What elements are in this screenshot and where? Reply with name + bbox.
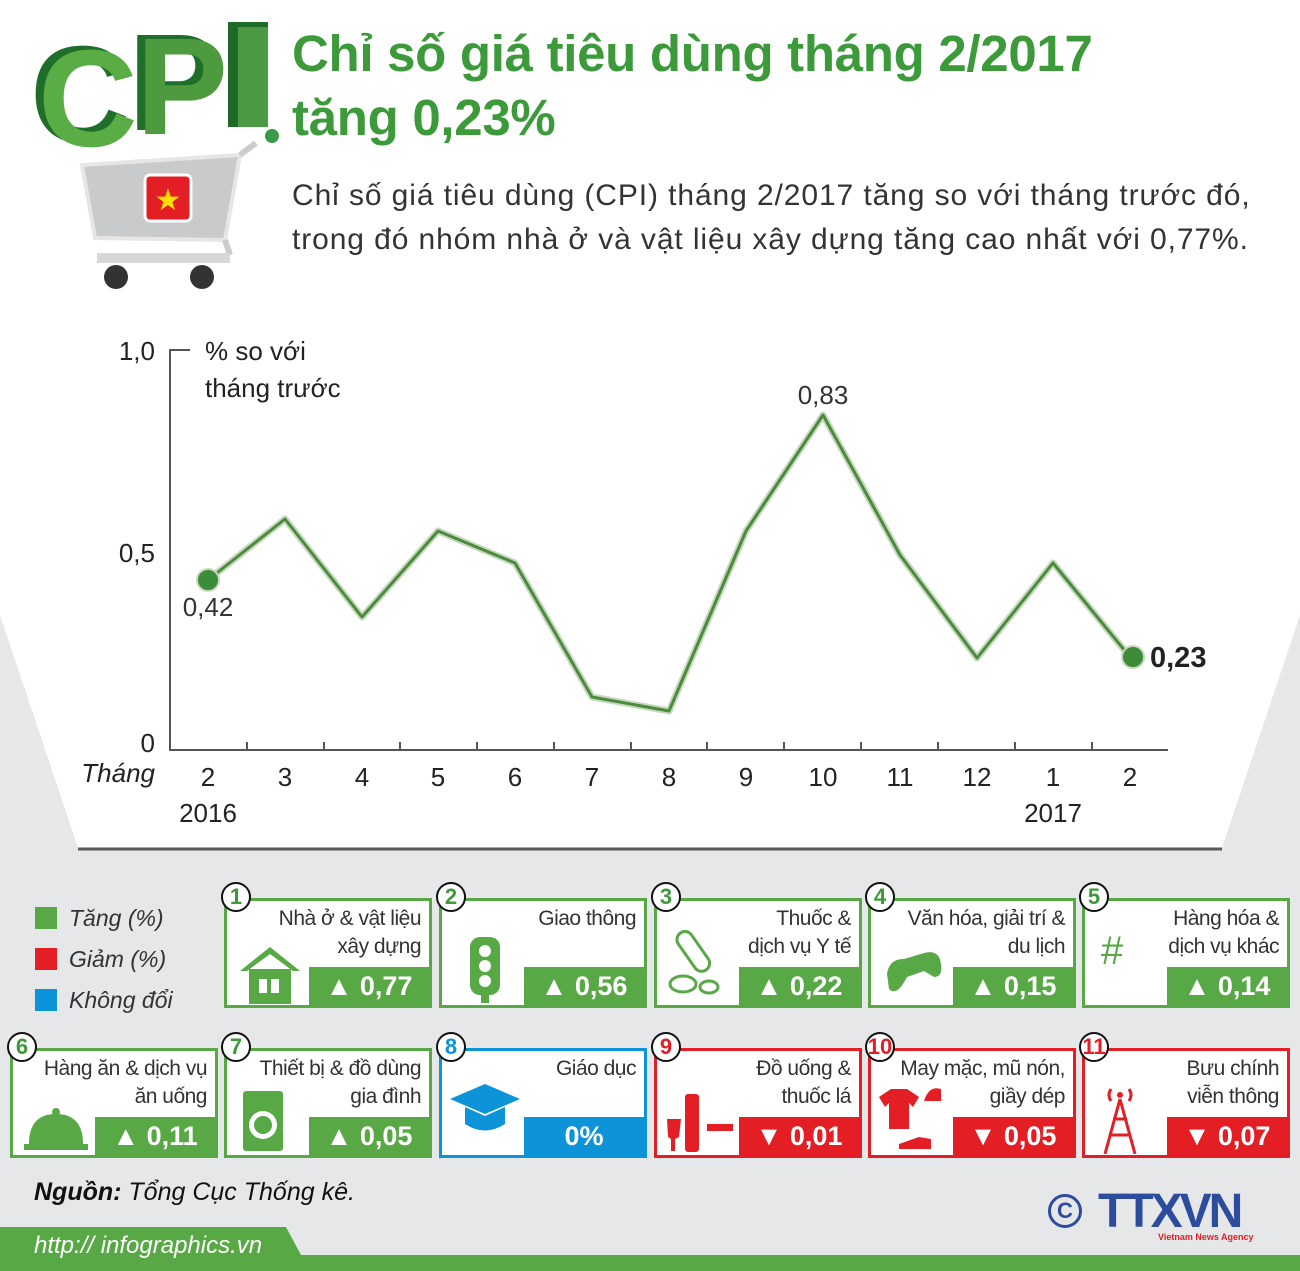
text: 7 [230,1034,242,1059]
legend [35,905,174,1013]
card 3: Thuốc & [776,907,851,930]
card 11: ▼ 0,07 [1184,1121,1270,1151]
text: 8 [445,1034,457,1059]
card 4: du lịch [1008,935,1065,958]
card 4: Văn hóa, giải trí & [908,907,1065,930]
card 9: Đồ uống & [756,1057,851,1080]
text: 2 [445,884,457,909]
card 5: ▲ 0,14 [1184,971,1270,1001]
line chart: 0,83 [798,380,848,410]
line chart: 3 [278,762,292,792]
logo: CPI cart: C [30,18,130,172]
card 9 [654,1048,862,1158]
line chart: 12 [963,762,991,792]
card 6 [10,1048,218,1158]
line chart: 2016 [179,798,237,828]
card 7 [224,1048,432,1158]
card 3: ▲ 0,22 [756,971,842,1001]
card 6: ăn uống [135,1085,207,1108]
text: 4 [874,884,886,909]
card 7: Thiết bị & đồ dùng [260,1057,421,1080]
card 1: xây dựng [337,935,421,958]
text: 10 [868,1034,892,1059]
line chart: 8 [662,762,676,792]
card 5: # [1101,929,1124,973]
card 10: ▼ 0,05 [970,1121,1056,1151]
logo: CPI cart: ★ [155,184,181,217]
card 5 [1082,898,1290,1008]
line chart: 2 [1123,762,1137,792]
subtitle: trong đó nhóm nhà ở và vật liệu xây dựng tăng cao nhất với 0,77%. [292,223,1249,256]
line chart: 4 [355,762,369,792]
card 2: ▲ 0,56 [541,971,627,1001]
card 1: Nhà ở & vật liệu [279,907,421,930]
line chart: 2017 [1024,798,1082,828]
line chart: 5 [431,762,445,792]
logo TTXVN: Vietnam News Agency [1158,1232,1254,1242]
card 7: gia đình [350,1085,421,1108]
card 11 [1082,1048,1290,1158]
card 11: viễn thông [1187,1085,1279,1108]
card 4: ▲ 0,15 [970,971,1056,1001]
line chart: Tháng [81,758,156,788]
title [292,25,1093,146]
source: Nguồn: Tổng Cục Thống kê. [34,1178,355,1206]
card 5: Hàng hóa & [1173,907,1279,930]
line chart: 2 [201,762,215,792]
text: 9 [660,1034,672,1059]
logo TTXVN: TTXVN [1098,1185,1240,1238]
line chart: 10 [809,762,837,792]
card 10: May mặc, mũ nón, [900,1057,1065,1080]
card 7: ▲ 0,05 [326,1121,412,1151]
card 8: 0% [564,1121,604,1151]
line chart: 0,23 [1150,642,1206,674]
line chart: % so với [205,336,306,366]
text: 11 [1082,1034,1106,1059]
subtitle [292,179,1251,256]
card 6: ▲ 0,11 [112,1121,198,1151]
card 11: Bưu chính [1187,1057,1279,1080]
text: http:// infographics.vn [34,1232,262,1259]
card 10: giầy dép [990,1085,1065,1108]
logo TTXVN: C [1057,1198,1073,1223]
card 3: dịch vụ Y tế [748,935,851,958]
card 6: Hàng ăn & dịch vụ [44,1057,207,1080]
text: 1 [230,884,242,909]
card 9: thuốc lá [781,1085,851,1108]
subtitle: Chỉ số giá tiêu dùng (CPI) tháng 2/2017 tăng so với tháng trước đó, [292,179,1251,212]
legend: Giảm (%) [69,946,166,972]
line chart: tháng trước [205,373,341,403]
line chart: 6 [508,762,522,792]
card 2: Giao thông [538,907,636,930]
legend: Tăng (%) [69,905,164,931]
line chart [81,336,1206,828]
card 2 [439,898,647,1008]
footer url bar [0,1227,1300,1271]
line chart: 0,5 [119,538,155,568]
line chart: 11 [886,762,914,792]
card 4 [868,898,1076,1008]
title: Chỉ số giá tiêu dùng tháng 2/2017 [292,25,1093,82]
text: 6 [16,1034,28,1059]
logo: CPI cart: C [38,22,138,176]
line chart: 1 [1046,762,1060,792]
text: 5 [1088,884,1100,909]
line chart: 0 [141,728,155,758]
line chart: 7 [585,762,599,792]
card 8 [439,1048,647,1158]
line chart: 9 [739,762,753,792]
line chart: 0,42 [183,592,233,622]
title: tăng 0,23% [292,89,555,146]
line chart: 1,0 [119,336,155,366]
card 5: dịch vụ khác [1168,935,1279,958]
card 1: ▲ 0,77 [326,971,412,1001]
card 1 [224,898,432,1008]
card 10 [868,1048,1076,1158]
text: 3 [660,884,672,909]
legend: Không đổi [69,987,173,1013]
logo: CPI cart [30,15,279,289]
card 8: Giáo dục [556,1057,636,1080]
card 3 [654,898,862,1008]
logo TTXVN [1048,1185,1254,1242]
card 9: ▼ 0,01 [756,1121,842,1151]
